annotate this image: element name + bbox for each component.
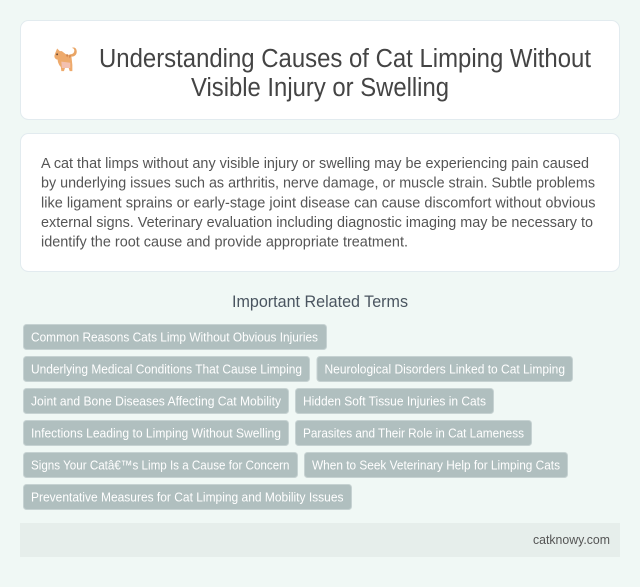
- text block: description: like ligament sprains or early-stage joint disease can cause discomfort without obvious: [41, 194, 596, 212]
- panel: related term tags: [24, 324, 572, 510]
- text block: description: [41, 155, 596, 250]
- footer: [20, 523, 620, 557]
- text block: description: identify the root cause and provide appropriate treatment.: [41, 234, 408, 250]
- panel: title card: [20, 20, 620, 120]
- tag: infections: Infections Leading to Limping Without Swelling: [31, 426, 281, 440]
- text block: description: by underlying issues such as arthritis, nerve damage, or muscle strain. Subtle problems: [41, 174, 595, 192]
- tag: veterinary help: When to Seek Veterinary Help for Limping Cats: [312, 458, 560, 472]
- icon: cat: [54, 48, 77, 71]
- footer: catknowy.com: [533, 532, 610, 547]
- tag: parasites: Parasites and Their Role in Cat Lameness: [303, 426, 524, 440]
- title: [99, 45, 591, 102]
- tag: joint and bone: Joint and Bone Diseases Affecting Cat Mobility: [31, 394, 282, 408]
- panel: description card: [20, 134, 620, 272]
- heading: related terms: Important Related Terms: [232, 293, 408, 311]
- tag: preventative measures: Preventative Measures for Cat Limping and Mobility Issues: [31, 490, 344, 504]
- title: Visible Injury or Swelling: [191, 74, 449, 102]
- tag: neurological disorders: [317, 356, 572, 382]
- text block: description: A cat that limps without any visible injury or swelling may be experiencing pain caused: [41, 155, 589, 172]
- tag: underlying conditions: Underlying Medical Conditions That Cause Limping: [31, 362, 302, 376]
- tag: signs of concern: [24, 452, 298, 478]
- tag: common reasons: [24, 324, 326, 350]
- tag: preventative measures: [24, 484, 352, 510]
- tag: underlying conditions: [24, 356, 310, 382]
- tag: joint and bone: [24, 388, 288, 414]
- tag: neurological disorders: Neurological Disorders Linked to Cat Limping: [324, 362, 565, 376]
- tag: infections: [24, 420, 288, 446]
- title: Understanding Causes of Cat Limping Without: [99, 45, 591, 73]
- tag: common reasons: Common Reasons Cats Limp Without Obvious Injuries: [31, 330, 318, 344]
- tag: signs of concern: Signs Your Catâ€™s Limp Is a Cause for Concern: [31, 458, 290, 472]
- text block: description: external signs. Veterinary evaluation including diagnostic imaging may be necessary to: [41, 214, 593, 231]
- tag: soft tissue: [296, 388, 494, 414]
- tag: soft tissue: Hidden Soft Tissue Injuries in Cats: [303, 394, 486, 408]
- tag: veterinary help: [304, 452, 568, 478]
- tag: parasites: [296, 420, 532, 446]
